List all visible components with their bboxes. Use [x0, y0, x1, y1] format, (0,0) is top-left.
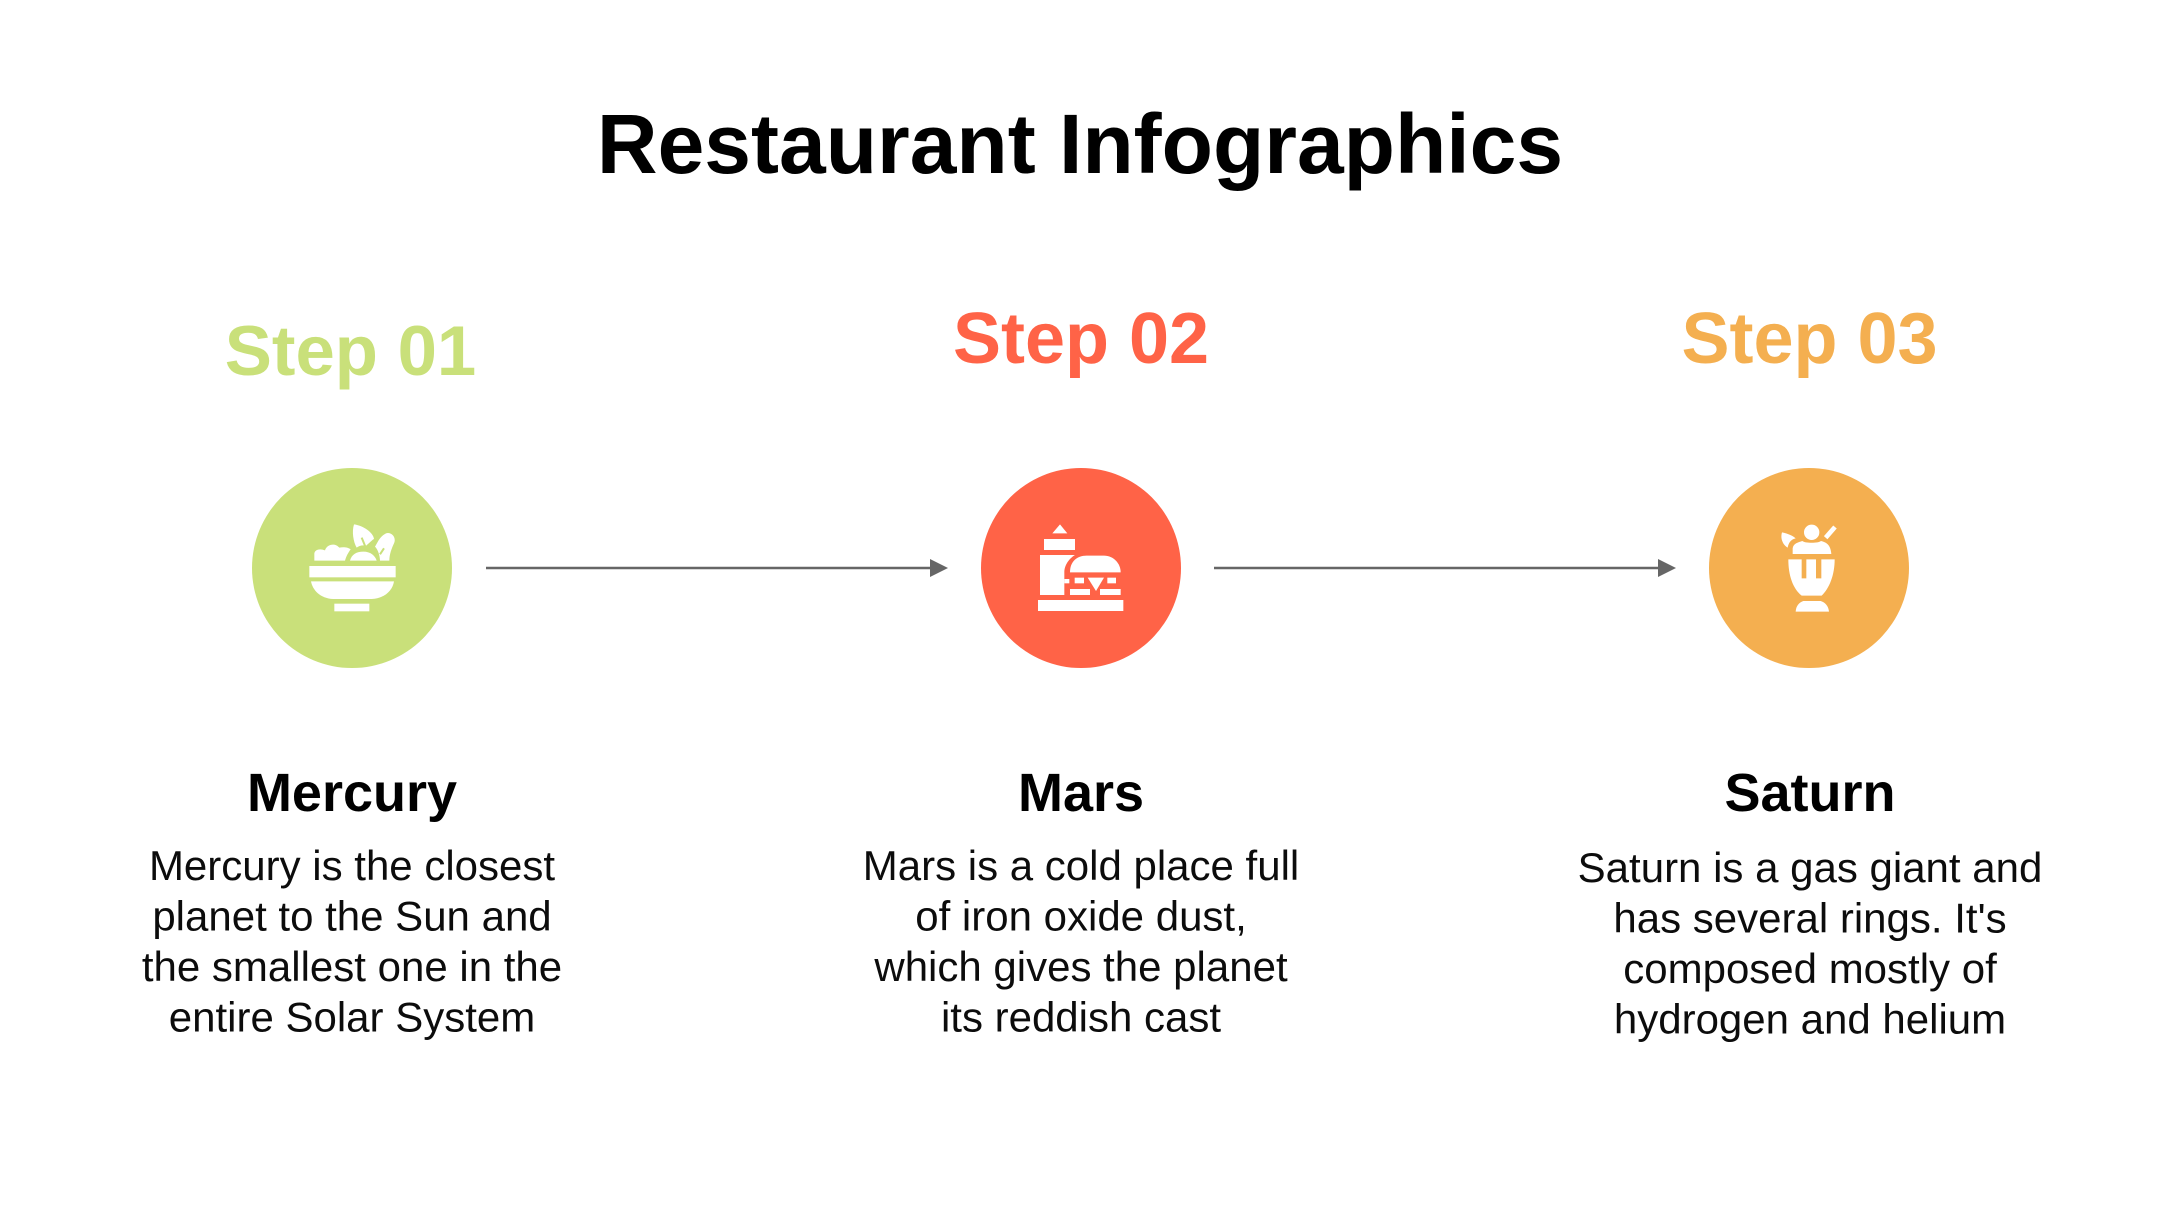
step 03 icon: sundae: [1709, 468, 1909, 668]
mars description: [863, 842, 1299, 1040]
step 01 icon: salad bowl: [252, 468, 452, 668]
mars column: [863, 763, 1299, 1040]
mars description: its reddish cast: [941, 994, 1221, 1040]
saturn description: Saturn is a gas giant and: [1578, 844, 2042, 891]
step 01 heading: Step 01: [225, 311, 476, 390]
saturn heading: Saturn: [1724, 763, 1896, 823]
saturn description: composed mostly of: [1623, 945, 1997, 992]
step 02 heading: Step 02: [953, 299, 1209, 379]
arrow 1: [486, 559, 948, 577]
saturn description: hydrogen and helium: [1614, 996, 2006, 1042]
mercury description: [142, 842, 562, 1040]
mercury heading: Mercury: [247, 763, 457, 823]
step 02 icon: burger and bottle: [981, 468, 1181, 668]
title: Restaurant Infographics: [597, 97, 1563, 191]
mercury description: Mercury is the closest: [149, 842, 555, 889]
mars heading: Mars: [1018, 763, 1144, 823]
saturn description: [1578, 844, 2042, 1042]
mars description: which gives the planet: [873, 943, 1288, 990]
saturn column: [1578, 763, 2042, 1042]
mercury column: [142, 763, 562, 1040]
mercury description: the smallest one in the: [142, 943, 562, 990]
mercury description: entire Solar System: [169, 994, 535, 1040]
step 03 heading: Step 03: [1681, 299, 1938, 379]
mars description: of iron oxide dust,: [915, 892, 1247, 940]
mercury description: planet to the Sun and: [152, 892, 552, 940]
saturn description: has several rings. It's: [1613, 894, 2007, 942]
mars description: Mars is a cold place full: [863, 842, 1299, 889]
arrow 2: [1214, 559, 1676, 577]
